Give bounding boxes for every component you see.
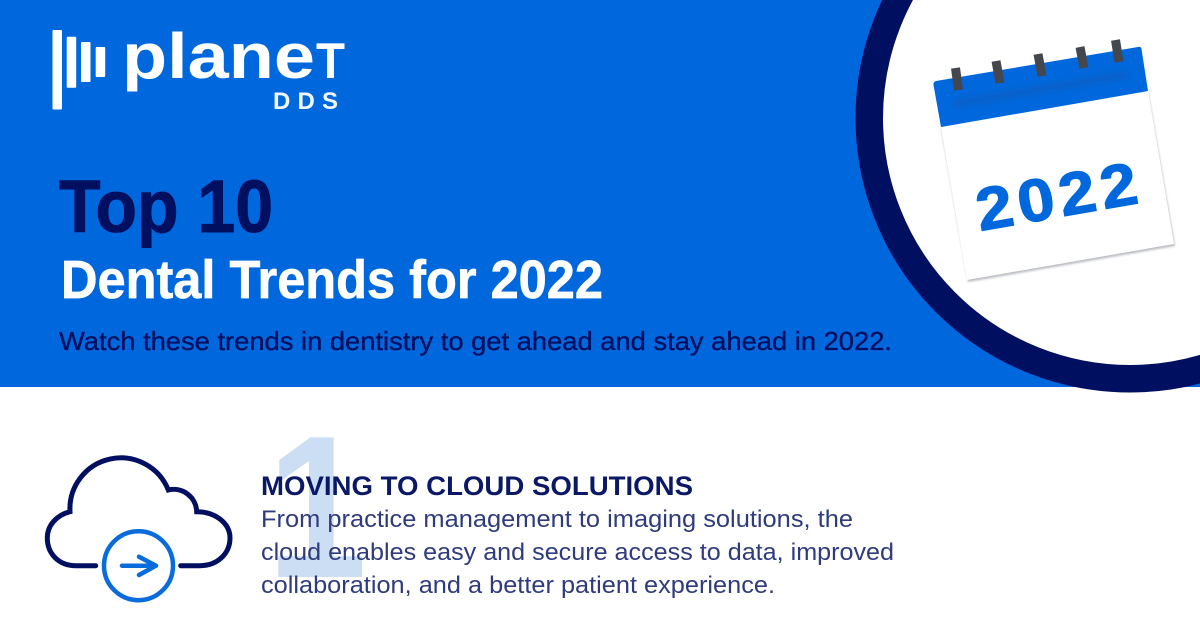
header banner (0, 0, 1200, 387)
logo wordmark (122, 20, 345, 115)
cloud outline (47, 458, 230, 566)
large numeral 1: 1 (267, 394, 367, 621)
logo wordmark: plane (122, 20, 315, 92)
trend 1 description: From practice management to imaging solutions, the (261, 506, 853, 533)
calendar medallion circle (869, 0, 1200, 379)
subtitle: Dental Trends for 2022: Dental Trends for 2022 (61, 250, 603, 310)
calendar header band (933, 47, 1148, 127)
logo: Planet DDS (52, 20, 345, 115)
calendar page (941, 91, 1175, 282)
calendar band shadow (954, 70, 1130, 109)
title: Top 10: Top 10 (59, 165, 273, 248)
trend 1 description (261, 506, 894, 599)
trend 1 description: collaboration, and a better patient experience. (261, 572, 775, 599)
logo wordmark: T (316, 33, 345, 89)
logo bars icon (52, 30, 105, 110)
trend 1 heading: MOVING TO CLOUD SOLUTIONS (261, 471, 693, 501)
calendar binding rings (956, 40, 1119, 90)
icon: cloud with arrow (47, 458, 230, 600)
tagline: Watch these trends in dentistry to get ahead and stay ahead in 2022. (59, 326, 892, 356)
icon: calendar 2022 (933, 40, 1175, 282)
logo wordmark: DDS (273, 88, 338, 115)
arrow (122, 557, 156, 575)
arrow circle (104, 531, 173, 600)
calendar year: 2022 (971, 149, 1148, 244)
trend 1 description: cloud enables easy and secure access to data, improved (261, 539, 894, 566)
